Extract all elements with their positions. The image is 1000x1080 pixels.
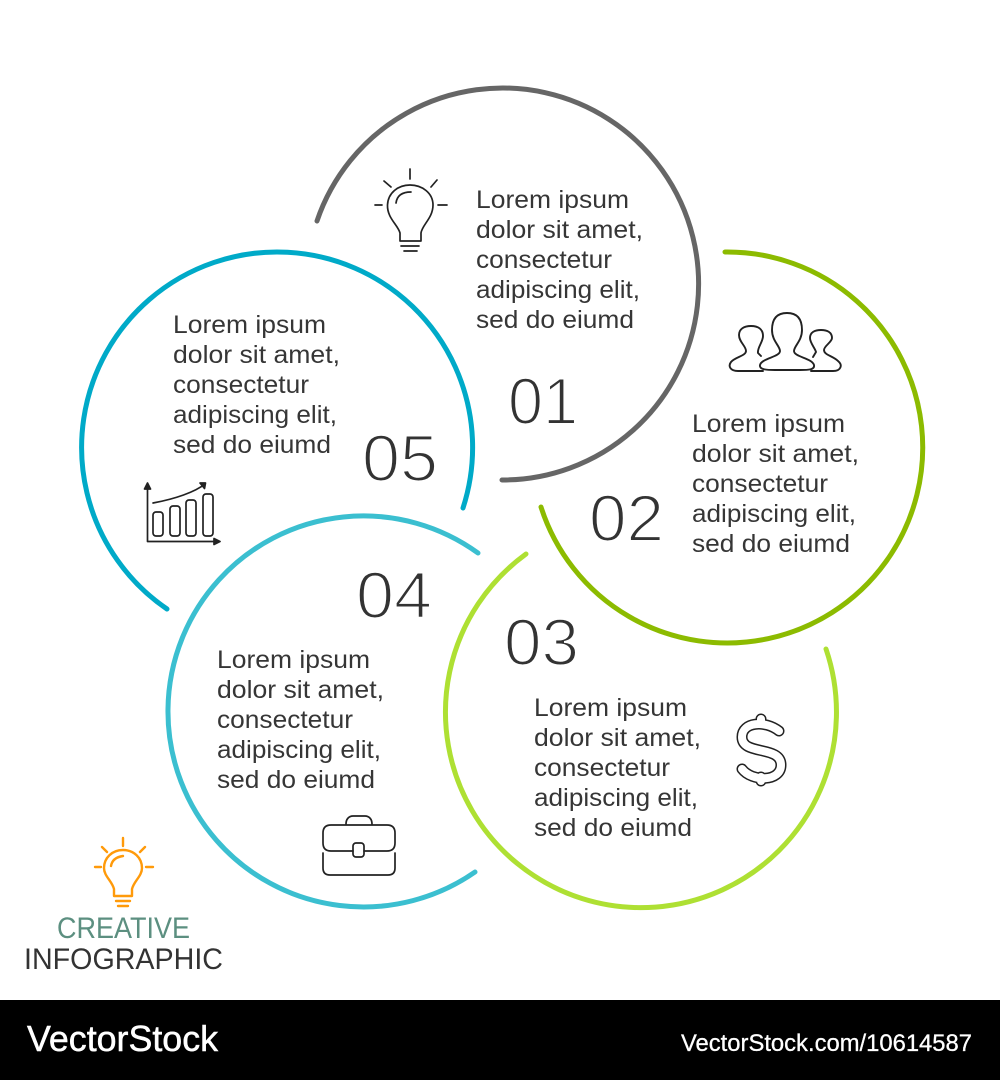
text block: step 04: Lorem ipsum — [217, 646, 370, 674]
text block: step 01: sed do eiumd — [476, 306, 634, 334]
text block: step 05: consectetur — [173, 371, 309, 399]
text block: step 01: dolor sit amet, — [476, 216, 643, 244]
text block: step 05: adipiscing elit, — [173, 401, 337, 429]
text block: step 03: adipiscing elit, — [534, 784, 698, 812]
text block: step 02 — [692, 410, 859, 558]
arc: step 02 — [541, 252, 923, 643]
text block: step 03: consectetur — [534, 754, 670, 782]
icon: briefcase — [323, 816, 395, 875]
number 05: 05 — [362, 421, 438, 495]
footer bar — [0, 1000, 1000, 1080]
text block: step 02: sed do eiumd — [692, 530, 850, 558]
footer brand: VectorStock — [27, 1018, 219, 1059]
text block: step 02: adipiscing elit, — [692, 500, 856, 528]
text block: step 01: Lorem ipsum — [476, 186, 629, 214]
logo word: infographic: INFOGRAPHIC — [24, 943, 223, 976]
text block: step 01: consectetur — [476, 246, 612, 274]
text block: step 05: Lorem ipsum — [173, 311, 326, 339]
panel: step 01 — [317, 88, 699, 480]
icon: bar chart — [144, 483, 220, 544]
arc: step 01 — [317, 88, 699, 480]
text block: step 03 — [534, 694, 701, 842]
arc: step 04 — [168, 516, 478, 907]
text block: step 01: adipiscing elit, — [476, 276, 640, 304]
panel: step 02 — [541, 252, 923, 643]
arc: step 05 — [82, 252, 473, 609]
text block: step 01 — [476, 186, 643, 334]
panel: step 05 — [82, 252, 473, 609]
text block: step 04: sed do eiumd — [217, 766, 375, 794]
icon: light bulb — [375, 169, 447, 251]
text block: step 04: dolor sit amet, — [217, 676, 384, 704]
text block: step 03: Lorem ipsum — [534, 694, 687, 722]
number 03: 03 — [504, 605, 579, 679]
text block: step 02: dolor sit amet, — [692, 440, 859, 468]
text block: step 04: consectetur — [217, 706, 353, 734]
number 01: 01 — [508, 364, 578, 438]
icon: orange light bulb — [95, 838, 153, 906]
text block: step 05: dolor sit amet, — [173, 341, 340, 369]
text block: step 05: sed do eiumd — [173, 431, 331, 459]
arc: step 03 — [445, 554, 836, 908]
text block: step 04 — [217, 646, 384, 794]
logo word: creative: CREATIVE — [57, 912, 190, 945]
panel: step 04 — [168, 516, 478, 907]
footer url: VectorStock.com/10614587 — [681, 1030, 972, 1057]
icon: dollar sign — [742, 719, 781, 781]
icon: people — [730, 313, 841, 371]
text block: step 05 — [173, 311, 340, 459]
text block: step 03: sed do eiumd — [534, 814, 692, 842]
text block: step 02: consectetur — [692, 470, 828, 498]
number 02: 02 — [589, 481, 664, 555]
panel: step 03 — [445, 554, 836, 908]
logo: creative infographic — [24, 838, 223, 976]
text block: step 04: adipiscing elit, — [217, 736, 381, 764]
number 04: 04 — [356, 558, 432, 632]
text block: step 02: Lorem ipsum — [692, 410, 845, 438]
text block: step 03: dolor sit amet, — [534, 724, 701, 752]
